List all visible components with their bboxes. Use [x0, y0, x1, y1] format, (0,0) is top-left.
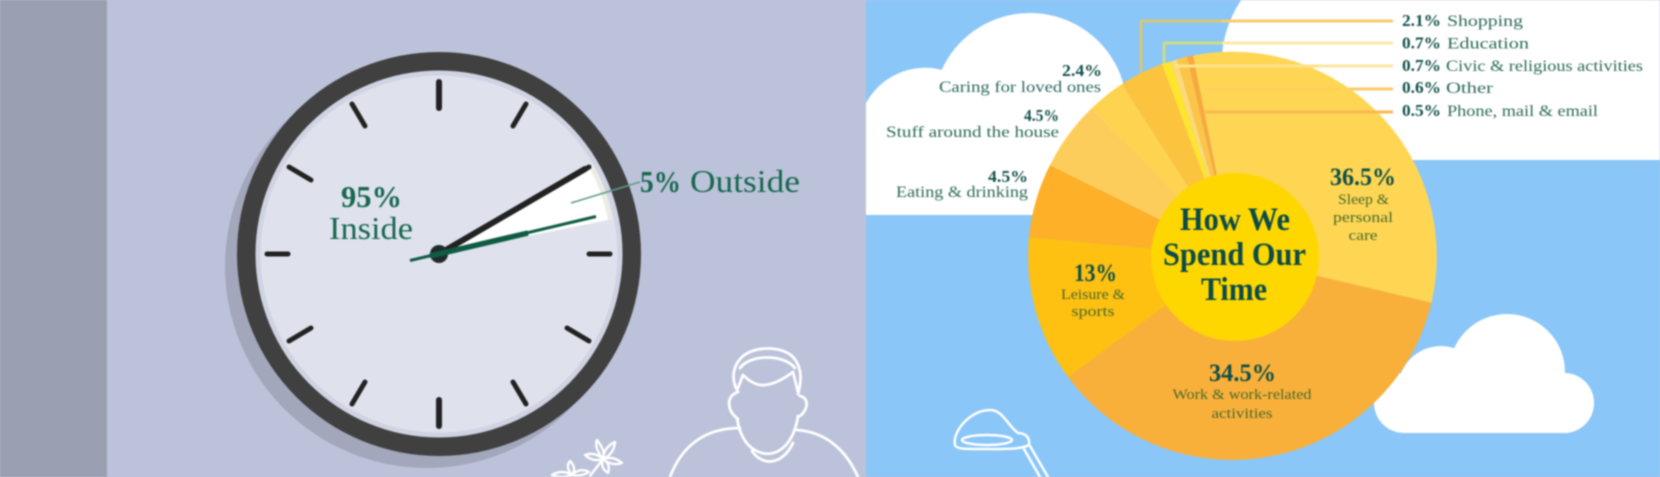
label: 95% inside	[329, 179, 413, 246]
label: eating: 4.5%	[988, 167, 1028, 186]
outside wedge	[439, 164, 612, 254]
label: sleep: Sleep &	[1338, 192, 1390, 208]
label: 95% inside: Inside	[329, 210, 413, 246]
slice: leisure and sports	[1028, 237, 1233, 377]
label: 5% outside: Outside	[690, 163, 800, 199]
label: stuff around the house: 4.5%	[1024, 106, 1059, 125]
label: caring: Caring for loved ones	[939, 79, 1101, 96]
label: sleep	[1330, 164, 1396, 244]
cloud: bottom right	[1374, 314, 1594, 433]
label: 95% inside: 95%	[341, 179, 402, 214]
label: stuff around the house: Stuff around the house	[886, 124, 1059, 141]
title: How We	[1180, 202, 1290, 238]
slice: sleep and personal care	[1193, 52, 1437, 303]
slice: phone, mail and email	[1187, 56, 1233, 256]
title	[1163, 202, 1306, 308]
label: phone: Phone, mail & email	[1447, 103, 1599, 120]
label: work: activities	[1212, 406, 1273, 422]
clock hub	[430, 245, 448, 263]
icon: plant outline	[552, 440, 622, 477]
label: 5% outside: 5%	[640, 164, 681, 199]
label: education: 0.7%	[1402, 34, 1441, 52]
label: leisure	[1061, 260, 1126, 320]
cloud: top right	[1222, 0, 1660, 160]
label: education: Education	[1447, 36, 1529, 52]
slice: education	[1162, 62, 1233, 256]
label: leisure: sports	[1072, 304, 1115, 320]
cloud: top left	[866, 13, 1127, 215]
label: sleep: personal	[1333, 210, 1393, 226]
icon: lamp outline	[955, 410, 1048, 477]
clock shadow	[225, 64, 629, 468]
hour hand	[439, 169, 585, 254]
label: civic	[1402, 56, 1643, 75]
label: other: 0.6%	[1402, 78, 1441, 97]
leader line to outside label	[571, 182, 640, 203]
label: caring	[939, 61, 1102, 96]
label: leisure: 13%	[1074, 260, 1117, 287]
label: education	[1402, 34, 1529, 52]
label: eating	[896, 167, 1028, 201]
label: other	[1402, 78, 1494, 97]
slice: shopping	[1122, 64, 1233, 256]
slice: civic and religious	[1171, 60, 1233, 256]
pie chart	[1028, 52, 1437, 460]
title: Time	[1201, 272, 1267, 308]
label: work	[1172, 360, 1312, 422]
label: work: Work & work-related	[1172, 387, 1312, 403]
center circle	[1151, 173, 1319, 341]
label: shopping	[1402, 11, 1523, 30]
slice: eating and drinking	[1029, 165, 1233, 256]
title: Spend Our	[1163, 237, 1306, 273]
minute hand	[410, 216, 596, 260]
label: civic: Civic & religious activities	[1446, 58, 1643, 75]
leader lines: small categories	[1141, 21, 1393, 112]
slice: stuff around the house	[1050, 108, 1233, 256]
label: caring: 2.4%	[1062, 61, 1102, 80]
label: sleep: care	[1348, 228, 1378, 244]
wall side band	[0, 0, 107, 477]
label: eating: Eating & drinking	[896, 184, 1028, 201]
label: stuff around the house	[886, 106, 1059, 141]
label: work: 34.5%	[1209, 360, 1276, 387]
label: civic: 0.7%	[1402, 56, 1441, 75]
slice: caring for loved ones	[1092, 84, 1233, 256]
label: sleep: 36.5%	[1330, 164, 1396, 191]
icon: man outline	[670, 348, 858, 477]
label: shopping: 2.1%	[1402, 11, 1441, 30]
label: shopping: Shopping	[1447, 13, 1523, 30]
clock	[237, 52, 641, 456]
label: leisure: Leisure &	[1061, 287, 1126, 303]
leader lines over pie	[1175, 66, 1380, 112]
slice: work	[1068, 256, 1431, 460]
label: phone	[1402, 101, 1599, 120]
panel: clock on wall	[0, 0, 866, 477]
label: 5% outside	[640, 163, 800, 199]
panel: sky with time-use pie	[866, 0, 1660, 477]
slice: other	[1177, 56, 1233, 256]
hour ticks	[267, 82, 610, 426]
label: phone: 0.5%	[1402, 101, 1441, 120]
label: other: Other	[1446, 80, 1494, 97]
